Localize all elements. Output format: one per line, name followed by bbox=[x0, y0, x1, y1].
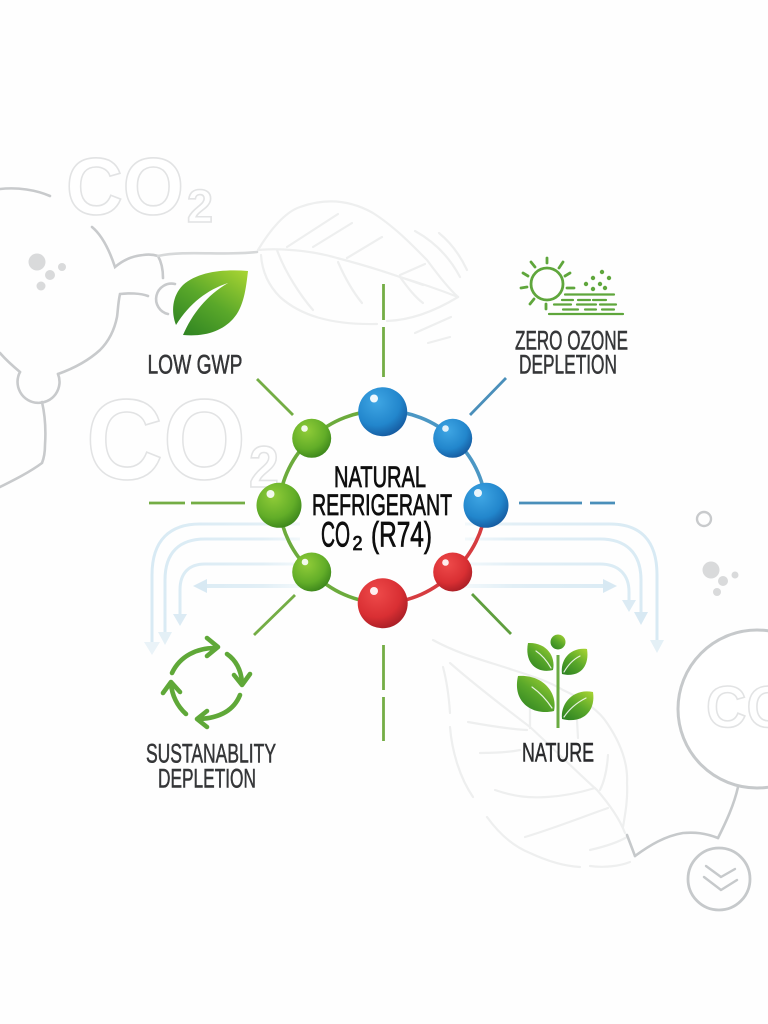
center title: (R74) bbox=[371, 516, 432, 554]
label: sustainability depletion bbox=[146, 738, 276, 794]
ring bonds bbox=[279, 411, 486, 603]
icon: chevron circle bbox=[688, 848, 750, 910]
icon: green leaf bbox=[173, 270, 248, 335]
background: top CO2 outline text: 2 bbox=[187, 180, 213, 232]
background: faint bottom leaf outline bbox=[433, 640, 630, 867]
label: low GWP: LOW GWP bbox=[148, 350, 242, 380]
background: faint top leaf outline bbox=[258, 201, 467, 343]
center title: CO bbox=[321, 516, 350, 554]
background: large CO2 outline text: 2 bbox=[249, 435, 279, 500]
background: top CO2 outline text: CO bbox=[66, 142, 184, 232]
background: left bubbles bbox=[28, 254, 66, 290]
background: right CO2 bubble bbox=[678, 630, 768, 788]
label: sustainability depletion: SUSTANABLITY bbox=[146, 738, 276, 768]
background: right network line art bbox=[627, 787, 738, 856]
background: right bubbles and ring bbox=[697, 512, 738, 596]
center title: REFRIGERANT bbox=[312, 489, 452, 522]
background: left network line art bbox=[0, 188, 257, 487]
label: sustainability depletion: DEPLETION bbox=[158, 764, 256, 794]
icon: recycling arrows bbox=[163, 638, 250, 727]
label: zero ozone depletion: ZERO OZONE bbox=[515, 326, 628, 356]
arrows: light blue flow lines right bbox=[465, 524, 664, 653]
background: large CO2 outline text: CO bbox=[86, 377, 246, 504]
atoms bbox=[256, 387, 508, 628]
icon: plant sprout bbox=[517, 634, 593, 728]
icon: sun over ozone layers bbox=[521, 258, 623, 314]
spokes: radiating connector lines bbox=[149, 284, 615, 741]
label: zero ozone depletion bbox=[515, 326, 628, 380]
molecule ring bbox=[256, 387, 508, 628]
center title: NATURAL bbox=[334, 461, 426, 494]
center title bbox=[312, 461, 452, 555]
arrows: light blue flow lines left bbox=[144, 524, 300, 655]
center title: 2 bbox=[352, 533, 362, 555]
label: nature: NATURE bbox=[522, 738, 594, 768]
label: zero ozone depletion: DEPLETION bbox=[519, 350, 617, 380]
